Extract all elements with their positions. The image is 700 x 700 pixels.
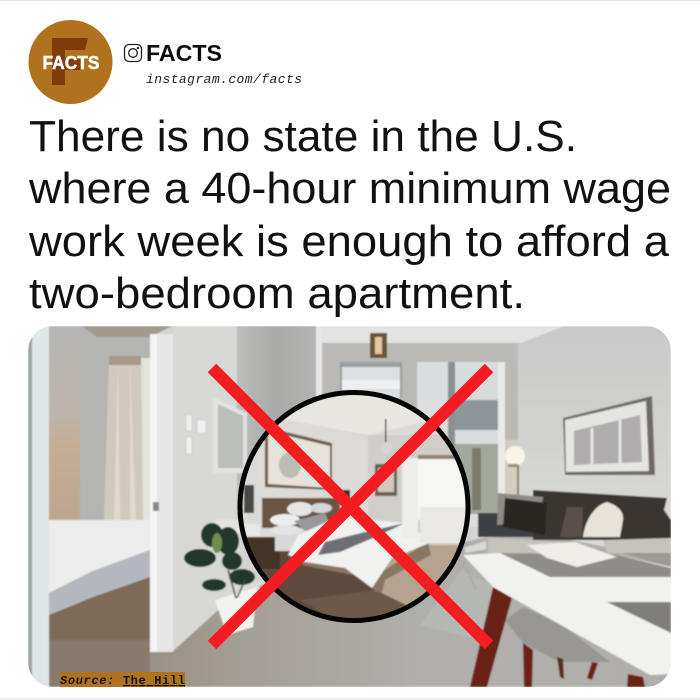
- floor: [149, 536, 668, 687]
- bowl: [527, 542, 617, 567]
- ceiling lamp: [370, 333, 387, 358]
- centre-left wall: [173, 326, 240, 651]
- ceiling: [286, 395, 425, 434]
- logo: FACTS badge: [28, 20, 112, 104]
- back wall and ceiling: [156, 326, 562, 586]
- bedroom through doorway: [49, 326, 172, 687]
- floor lamp: [504, 440, 526, 496]
- door post: [156, 334, 174, 653]
- headboard: [262, 498, 340, 528]
- bed cover: [288, 518, 432, 588]
- large windows: [340, 362, 505, 527]
- coffee table: [463, 540, 487, 590]
- side table: [243, 485, 280, 569]
- dining chair: [505, 607, 610, 687]
- headline: where a 40-hour minimum wage: [28, 165, 671, 213]
- account name: FACTS: [146, 40, 222, 66]
- wall switches: [186, 415, 206, 454]
- wall sconce: [342, 490, 350, 498]
- wall mirror: [213, 397, 247, 473]
- headline: work week is enough to afford a: [28, 218, 670, 266]
- bedroom floor: [261, 550, 375, 615]
- door frame left: [32, 326, 50, 686]
- headline: There is no state in the U.S.: [29, 113, 577, 161]
- small art: [375, 464, 397, 496]
- inset circle: bedroom: [238, 390, 470, 623]
- back wall: [368, 436, 459, 545]
- icon: instagram: [124, 44, 142, 62]
- bedroom artwork: [265, 427, 332, 490]
- account url: instagram.com/facts: [146, 72, 302, 87]
- pendant lamp: [384, 418, 388, 442]
- rug: [422, 572, 492, 637]
- headline: two-bedroom apartment.: [29, 270, 525, 318]
- right wall: [518, 326, 670, 495]
- pillows: [270, 502, 332, 551]
- red X mark: [212, 368, 489, 645]
- headline: [28, 113, 671, 318]
- dining table: [463, 553, 671, 687]
- photo: apartment interior: [28, 326, 671, 688]
- logo: FACTS badge: FACTS: [42, 52, 100, 73]
- source label: Source: The Hill: [60, 674, 185, 688]
- wall art: [563, 396, 655, 475]
- window and curtain: [418, 458, 466, 520]
- bed frame: [302, 541, 431, 592]
- plant and pot: [184, 520, 262, 635]
- sofa: [478, 490, 671, 553]
